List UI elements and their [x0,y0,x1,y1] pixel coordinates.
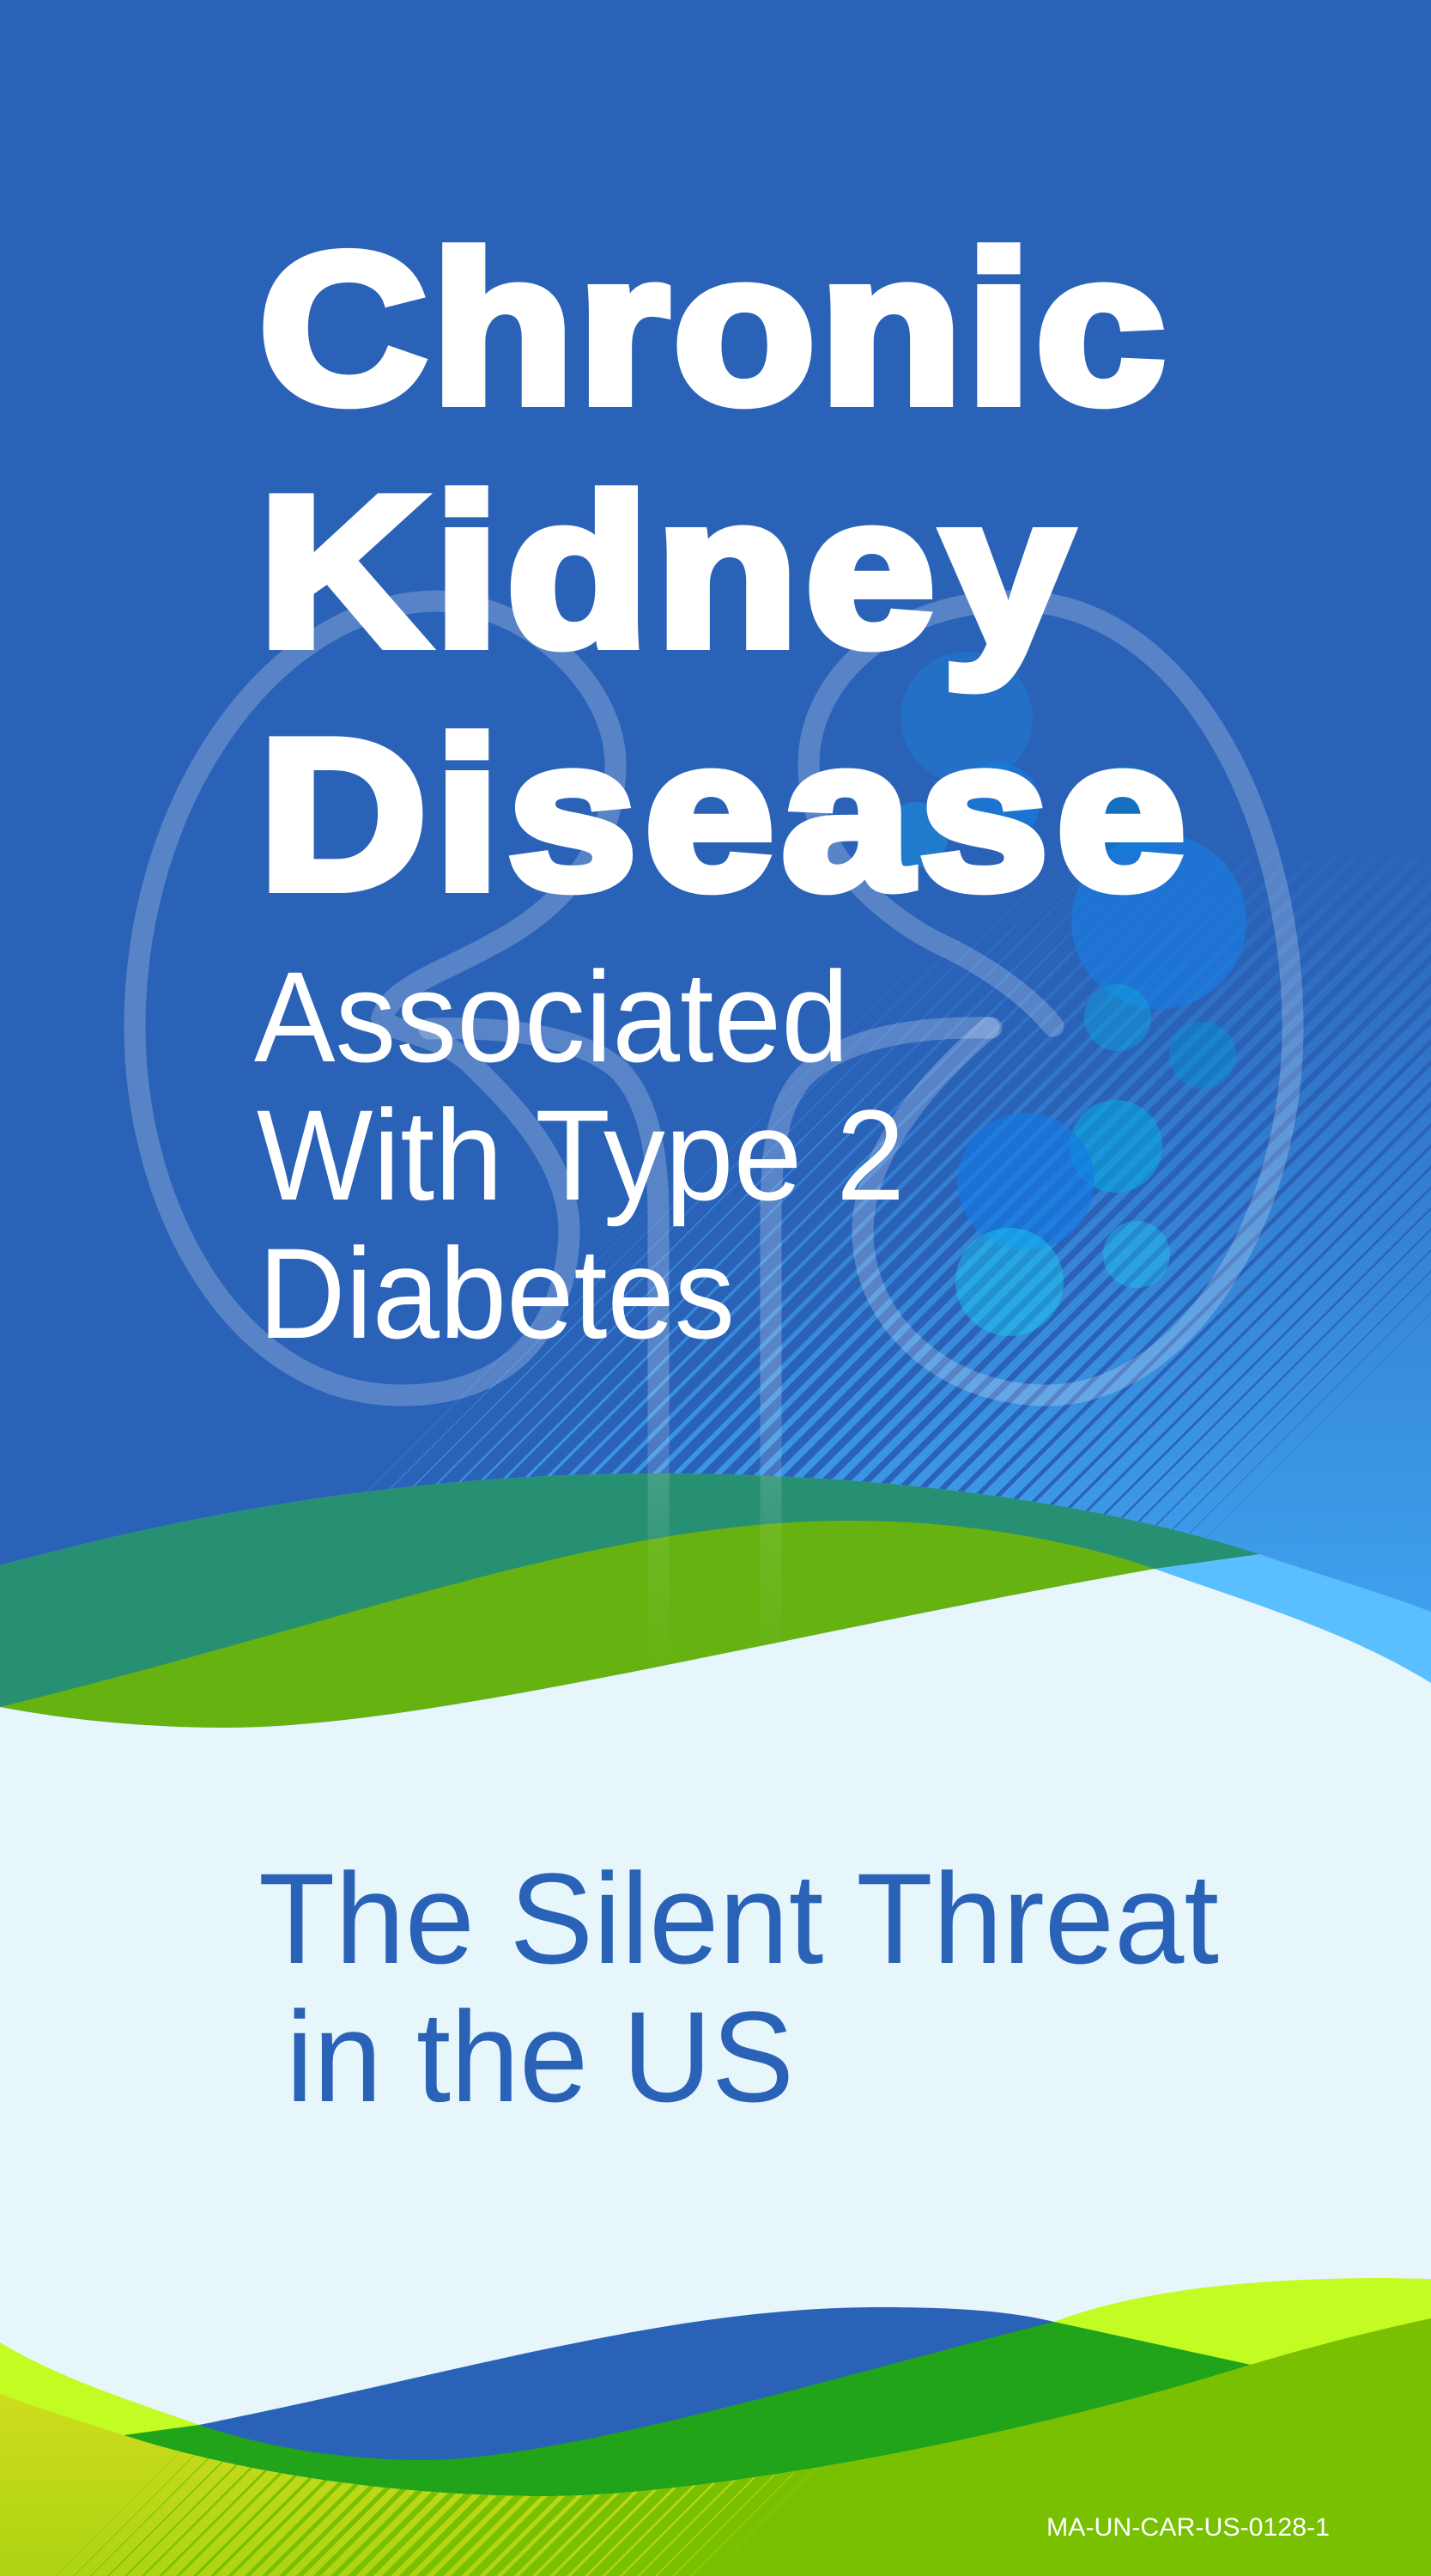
tagline: in the US [286,1984,794,2129]
lower wave: yellow to green hatched field [0,2318,1431,2576]
lower wave: dark green band [124,2322,1251,2496]
kidney outlines [135,601,1293,1395]
title: Kidney [259,452,1073,691]
subtitle: Associated [254,945,849,1089]
title: Chronic [259,209,1165,447]
lower wave: blue band [199,2307,1054,2460]
left kidney [135,601,615,1395]
pale content area [0,1569,1431,2576]
lower wave: lime band [0,2278,1431,2576]
right kidney [809,601,1293,1395]
title [259,209,1185,933]
ureter lines [429,1028,991,1651]
subtitle [254,945,905,1365]
upper wave: green band [0,1521,1155,1728]
diagonal hatch gradient, upper right [141,0,1431,1717]
tagline [258,1846,1219,2129]
subtitle: With Type 2 [257,1083,905,1227]
title: Disease [259,695,1185,933]
document code: MA-UN-CAR-US-0128-1 [1046,2513,1330,2542]
tagline: The Silent Threat [258,1846,1219,1990]
upper wave: light blue band [0,1473,1431,1803]
upper wave: teal band [0,1473,1259,1707]
subtitle: Diabetes [258,1221,735,1365]
blue translucent circles [883,652,1246,1336]
blue background [0,0,1431,1803]
